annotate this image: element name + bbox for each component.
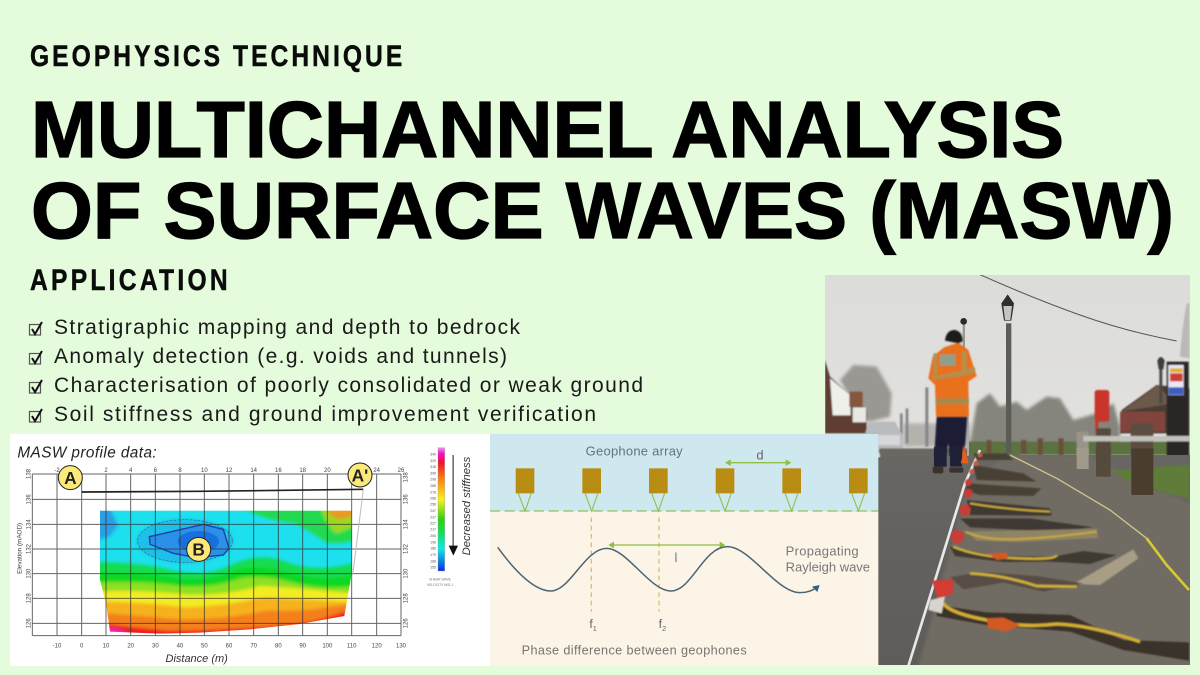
marker B: B: [192, 539, 205, 559]
label: propagating Rayleigh wave: [786, 544, 870, 574]
photo: lamp post: [1001, 294, 1014, 453]
label: propagating Rayleigh wave: Propagating: [786, 544, 859, 559]
right elevation labels: [403, 472, 409, 628]
right elevation labels: 130: [403, 568, 409, 579]
y axis title: Elevation (mAOD): [16, 523, 23, 574]
photo: pavement right of streamer: [917, 455, 1200, 673]
label: f1: 1: [593, 624, 597, 633]
marker A prime: A': [352, 465, 368, 485]
Rayleigh wave curve: [498, 547, 820, 593]
photo: grass verge: [1112, 465, 1189, 499]
x axis labels: 80: [275, 643, 282, 649]
ground surface profile line: [82, 489, 363, 492]
top axis labels: 14: [250, 468, 258, 474]
velocity colour scale: SHEAR WAVE: [429, 577, 452, 581]
spacing arrow d: [725, 447, 791, 466]
survey edge line: [353, 489, 363, 575]
x axis labels: [53, 643, 407, 649]
photo: survey pole: [960, 318, 969, 470]
top axis labels: -2: [54, 468, 60, 474]
velocity colour scale: 206: [430, 534, 436, 538]
x axis labels: 60: [226, 643, 233, 649]
left elevation labels: 138: [27, 468, 33, 479]
chart heading: MASW profile data:: [17, 445, 157, 462]
phase guide lines: [591, 517, 659, 612]
top axis labels: 26: [398, 468, 405, 474]
x axis labels: 100: [322, 643, 333, 649]
label: f1: f: [589, 617, 593, 631]
velocity colour scale: 247: [430, 509, 436, 513]
title: MULTICHANNEL ANALYSIS: [31, 85, 1064, 174]
velocity colour scale: 217: [430, 528, 436, 532]
air layer: [490, 434, 878, 511]
velocity colour scale: 237: [430, 515, 436, 519]
caption: phase difference: Phase difference between geophones: [522, 644, 747, 658]
x axis labels: 40: [177, 643, 184, 649]
top axis labels: 8: [178, 468, 182, 474]
wavelength arrow l: l: [675, 550, 678, 565]
velocity colour scale: 308: [430, 471, 436, 475]
ground layer: [490, 511, 878, 666]
label: f2: f: [659, 617, 662, 631]
right elevation labels: 138: [403, 472, 409, 482]
top axis labels: 4: [129, 468, 133, 474]
right elevation labels: 126: [403, 618, 409, 628]
right elevation labels: 128: [403, 593, 409, 603]
photo: survey operator and geophone streamer: [825, 275, 1200, 673]
x axis labels: 70: [250, 643, 258, 649]
x axis labels: 130: [396, 643, 407, 649]
top axis labels: 16: [275, 468, 282, 474]
geophones: [516, 468, 868, 511]
photo: geophone land streamer: [928, 453, 1189, 661]
x axis labels: 30: [152, 643, 159, 649]
right elevation labels: 136: [403, 494, 409, 504]
velocity colour scale: 168: [430, 559, 436, 563]
ground surface dashed line: [490, 509, 878, 513]
label: f2: 2: [662, 624, 666, 633]
photo: road surface and streamer: [827, 447, 1200, 673]
marker A: [58, 466, 82, 490]
x axis labels: 20: [127, 643, 135, 649]
top axis labels: 10: [201, 468, 208, 474]
left elevation labels: 130: [27, 568, 33, 579]
left elevation labels: 128: [27, 593, 33, 603]
velocity colour scale: [427, 448, 453, 587]
label: geophone array: Geophone array: [586, 444, 683, 459]
label: propagating Rayleigh wave: Rayleigh wave: [786, 559, 870, 574]
item: anomaly detection: Anomaly detection (e.g. voids and tunnels): [54, 345, 507, 368]
photo: operator: [928, 330, 977, 470]
velocity contour field: [100, 510, 352, 634]
left elevation labels: 132: [27, 543, 33, 554]
application checklist: [30, 316, 643, 426]
item: soil stiffness: Soil stiffness and ground improvement verification: [54, 403, 596, 426]
x axis labels: 50: [201, 643, 208, 649]
top axis labels: [54, 468, 405, 474]
title: [31, 85, 1174, 255]
photo: overhead wire: [980, 275, 1177, 341]
left elevation labels: [27, 468, 33, 628]
top axis labels: 20: [324, 468, 331, 474]
left elevation labels: 126: [27, 618, 33, 628]
velocity colour scale: 186: [430, 547, 436, 551]
marker A: A: [64, 468, 77, 488]
panel: MASW profile data: [10, 434, 490, 666]
right elevation labels: 132: [403, 543, 409, 554]
left elevation labels: 134: [27, 519, 33, 529]
chart grid: [32, 474, 401, 636]
velocity colour scale: 268: [430, 496, 436, 500]
panel: geophone array diagram: [490, 434, 878, 666]
heading: application: APPLICATION: [30, 263, 228, 297]
eyebrow heading: GEOPHYSICS TECHNIQUE: [30, 39, 402, 73]
decreased stiffness arrow: [449, 455, 458, 556]
x axis labels: 120: [372, 643, 382, 649]
x axis labels: 90: [299, 643, 307, 649]
velocity colour scale: 329: [430, 459, 436, 463]
velocity colour scale: 298: [430, 478, 436, 482]
velocity colour scale: 179: [430, 553, 436, 557]
velocity colour scale: 258: [430, 503, 436, 507]
photo background: buildings, trees, street furniture: [825, 275, 1189, 470]
decreased stiffness label: Decreased stiffness: [461, 456, 473, 555]
wavelength arrow l: [608, 542, 725, 565]
top axis labels: 12: [226, 468, 233, 474]
top axis labels: 2: [104, 468, 108, 474]
velocity colour scale: 227: [430, 522, 436, 526]
x axis title: Distance (m): [166, 653, 228, 665]
title: OF SURFACE WAVES (MASW): [31, 166, 1174, 255]
left elevation labels: 136: [27, 494, 33, 504]
photo: white measuring tape: [908, 450, 980, 666]
anomaly zone outline: [138, 520, 232, 562]
top axis labels: 24: [373, 468, 381, 474]
x axis labels: 0: [80, 643, 84, 649]
x axis labels: 10: [103, 643, 110, 649]
velocity colour scale: 278: [430, 490, 436, 494]
velocity colour scale: 196: [430, 540, 436, 544]
velocity colour scale: 340: [430, 453, 436, 457]
photo: yellow measuring tape: [1010, 455, 1189, 590]
item: stratigraphic mapping: Stratigraphic mapping and depth to bedrock: [54, 316, 520, 339]
velocity colour scale: VELOCITY M/S-1: [427, 583, 453, 587]
x axis labels: 110: [347, 643, 357, 649]
velocity colour scale: 318: [430, 465, 436, 469]
photo: fence post bases: [933, 447, 1153, 495]
x axis labels: -10: [53, 643, 62, 649]
velocity colour scale: 155: [430, 566, 436, 570]
top axis labels: 18: [299, 468, 307, 474]
marker B: [187, 537, 211, 561]
item: weak ground: Characterisation of poorly consolidated or weak ground: [54, 374, 643, 397]
spacing arrow d: d: [756, 447, 764, 462]
top axis labels: 6: [154, 468, 158, 474]
marker A prime: [348, 463, 372, 487]
right elevation labels: 134: [403, 519, 409, 529]
velocity colour scale: 288: [430, 484, 436, 488]
